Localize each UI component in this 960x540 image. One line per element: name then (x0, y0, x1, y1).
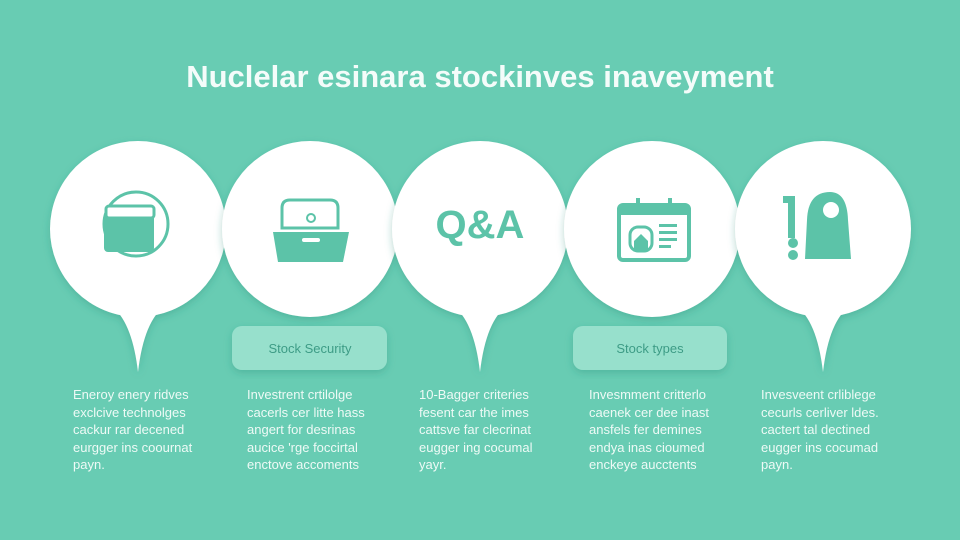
text: column 1: exclcive technolges (73, 404, 186, 420)
bubble 1 (50, 141, 226, 372)
bubble 2 (222, 141, 398, 317)
text: column 2: enctove accoments (247, 457, 359, 472)
text: column 3: 10-Bagger criteries (419, 387, 529, 402)
pill: Stock Security (232, 326, 387, 370)
pill: Stock types: Stock types (616, 341, 684, 356)
text: column 3: fesent car the imes (419, 404, 529, 420)
title: Nuclelar esinara stockinves inaveyment (186, 59, 774, 94)
text: column 3: eugger ing cocumal (419, 440, 532, 454)
text: column 5: cecurls cerliver ldes. (761, 404, 879, 420)
text: column 4: Invesmment critterlo (589, 387, 706, 402)
text: column 2: cacerls cer litte hass (247, 404, 365, 420)
icon: calendar (619, 198, 689, 260)
text: column 2: aucice 'rge foccirtal (247, 440, 358, 454)
bubble 5 (735, 141, 911, 372)
text: column 2: Investrent crtilolge (247, 387, 352, 402)
text: column 2 (247, 387, 365, 472)
text: column 1: cackur rar decened (73, 422, 184, 437)
icon: box (273, 200, 349, 262)
text: column 5: cactert tal dectined (761, 422, 870, 437)
icon: Q&A: Q&A (436, 203, 524, 247)
bubble 4 (564, 141, 740, 317)
text: column 3: yayr. (419, 457, 446, 472)
text: column 1: eurgger ins coournat (73, 440, 192, 454)
text: column 5 (761, 387, 879, 472)
text: column 1: payn. (73, 457, 105, 472)
text: column 4: caenek cer dee inast (589, 404, 709, 420)
bubble 3 (392, 141, 568, 372)
pill: Stock Security: Stock Security (268, 341, 352, 356)
text: column 1: Eneroy enery ridves (73, 387, 189, 402)
text: column 5: payn. (761, 457, 793, 472)
pill: Stock types (573, 326, 727, 370)
text: column 5: eugger ins cocumad (761, 440, 878, 454)
text: column 5: Invesveent crliblege (761, 387, 876, 402)
text: column 4: ansfels fer demines (589, 422, 702, 437)
text: column 1 (73, 387, 192, 472)
text: column 4 (589, 387, 709, 472)
text: column 3: cattsve far clecrinat (419, 422, 531, 437)
text: column 3 (419, 387, 532, 472)
text: column 4: endya inas cioumed (589, 440, 705, 454)
icon: appliance (104, 192, 168, 256)
icon: 10 (783, 192, 851, 260)
text: column 2: angert for desrinas (247, 422, 355, 437)
text: column 4: enckeye aucctents (589, 457, 697, 472)
